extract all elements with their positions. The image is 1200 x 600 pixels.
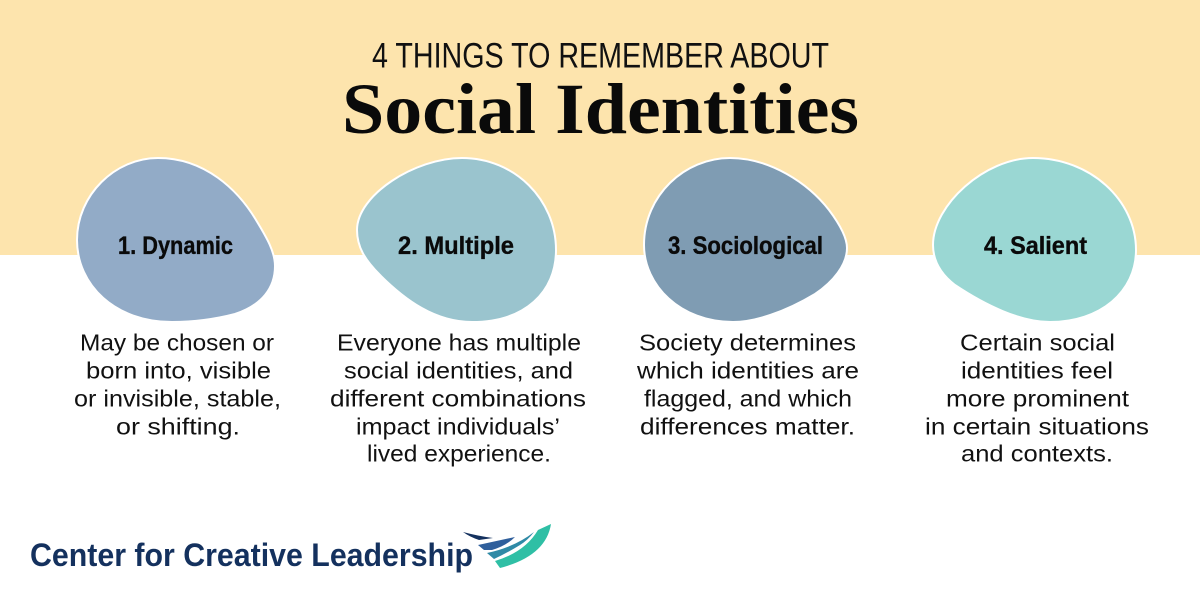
label 4: 4. Salient <box>984 232 1088 260</box>
description 2 <box>330 330 586 466</box>
description 1: or invisible, stable, <box>74 386 281 412</box>
blob 1 <box>77 158 275 322</box>
blob 3 <box>644 158 847 322</box>
description 1: May be chosen or <box>80 330 274 356</box>
blob 4 <box>933 158 1136 322</box>
description 4: and contexts. <box>961 440 1113 466</box>
description 4 <box>925 330 1149 466</box>
logo: Center for Creative Leadership <box>30 524 551 573</box>
label 2: 2. Multiple <box>398 232 514 260</box>
label 1: 1. Dynamic <box>118 232 233 260</box>
label 3: 3. Sociological <box>668 232 823 260</box>
panel: 1 Dynamic <box>74 158 281 440</box>
description 4: more prominent <box>946 386 1130 412</box>
description 3: Society determines <box>639 330 856 356</box>
title: Social Identities <box>342 69 859 149</box>
description 3: which identities are <box>636 358 859 384</box>
description 1: born into, visible <box>86 358 271 384</box>
subtitle: 4 THINGS TO REMEMBER ABOUT <box>372 36 829 76</box>
description 3: differences matter. <box>640 414 855 440</box>
description 2: social identities, and <box>344 358 573 384</box>
logo wordmark: Center for Creative Leadership <box>30 537 473 573</box>
header background band <box>0 0 1200 255</box>
description 1 <box>74 330 281 440</box>
description 4: Certain social <box>960 330 1115 356</box>
description 2: Everyone has multiple <box>337 330 581 356</box>
logo icon: swoosh <box>463 524 551 568</box>
description 4: in certain situations <box>925 414 1149 440</box>
panel: 3 Sociological <box>636 158 859 440</box>
panel: 4 Salient <box>925 158 1149 466</box>
description 1: or shifting. <box>116 414 240 440</box>
panel: 2 Multiple <box>330 158 586 466</box>
description 3 <box>636 330 859 440</box>
description 2: different combinations <box>330 386 586 412</box>
description 3: flagged, and which <box>644 386 852 412</box>
description 2: impact individuals’ <box>356 414 560 440</box>
description 4: identities feel <box>961 358 1113 384</box>
blob 2 <box>357 158 556 322</box>
description 2: lived experience. <box>367 440 551 466</box>
